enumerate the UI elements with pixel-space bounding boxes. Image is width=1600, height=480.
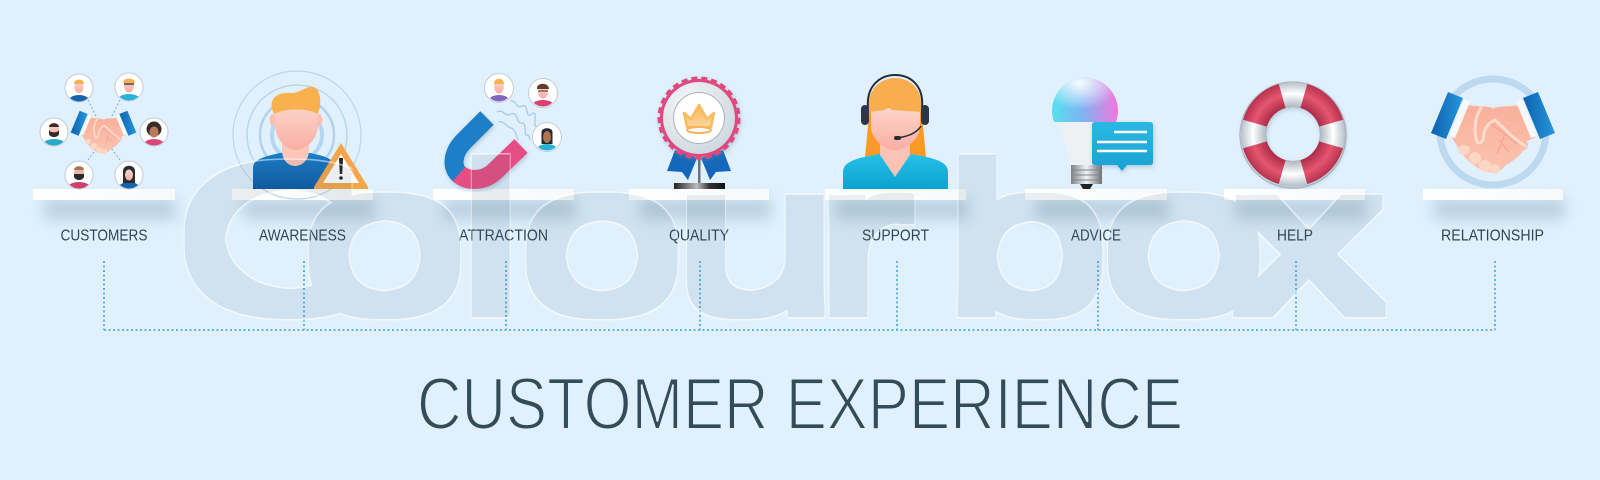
shelf shadow: support xyxy=(836,198,968,220)
watermark: olourbox xyxy=(302,124,1383,354)
shelf shadow: help xyxy=(1235,198,1367,220)
connector: dotted bracket xyxy=(104,261,1495,330)
label: support: SUPPORT xyxy=(862,228,929,244)
shelf: relationship xyxy=(1423,189,1563,200)
avatar: woman with black hair xyxy=(114,160,144,190)
icon: award stem and base xyxy=(674,155,725,189)
panel: advice xyxy=(1025,78,1169,244)
avatar: woman xyxy=(532,122,562,152)
icon: handshake xyxy=(1431,92,1555,174)
shelf shadow: quality xyxy=(640,198,771,220)
shelf: quality xyxy=(629,189,769,200)
shelf shadow: relationship xyxy=(1434,198,1565,220)
attraction waves xyxy=(497,101,539,140)
avatar: man with glasses xyxy=(114,72,144,102)
panel: relationship xyxy=(1423,79,1565,244)
label: relationship: RELATIONSHIP xyxy=(1441,228,1544,244)
avatar: blond person xyxy=(484,73,514,103)
shelf: advice xyxy=(1025,189,1167,200)
watermark: C xyxy=(176,124,389,354)
shelf: awareness xyxy=(232,189,373,200)
shelf shadow: customers xyxy=(44,198,176,220)
label: help: HELP xyxy=(1277,228,1313,244)
connection lines xyxy=(88,100,120,160)
panel: attraction xyxy=(433,74,576,244)
icon: ribbons xyxy=(667,150,731,180)
icon: ring xyxy=(1440,79,1546,185)
icon: handshake xyxy=(71,111,136,154)
label: advice: ADVICE xyxy=(1071,228,1121,244)
title: CUSTOMER EXPERIENCE xyxy=(417,364,1183,445)
shelf: help xyxy=(1224,189,1365,200)
icon: light bulb xyxy=(1052,78,1118,189)
icon: speech bubble xyxy=(1092,122,1153,171)
avatar: blond man xyxy=(64,74,94,102)
panel: support xyxy=(825,75,968,244)
icon: magnet xyxy=(454,118,521,179)
watermark xyxy=(184,153,1386,320)
icon: agent xyxy=(843,78,948,189)
avatar: woman with dark hair xyxy=(140,118,168,146)
label: awareness: AWARENESS xyxy=(259,228,346,244)
icon: crown xyxy=(684,105,714,133)
avatar: man with glasses xyxy=(528,78,558,108)
avatar: masked man xyxy=(64,160,94,190)
avatar: bearded man xyxy=(40,118,68,146)
label: customers: CUSTOMERS xyxy=(60,228,148,244)
panel: help xyxy=(1224,82,1367,244)
shelf: support xyxy=(825,189,966,200)
label: quality: QUALITY xyxy=(669,228,729,244)
panel: customers xyxy=(33,73,176,244)
panel: quality xyxy=(629,78,771,244)
shelf shadow: awareness xyxy=(243,198,375,220)
shelf shadow: advice xyxy=(1036,198,1169,220)
label: attraction: ATTRACTION xyxy=(459,228,548,244)
shelf shadow: attraction xyxy=(444,198,576,220)
icon: lifebuoy xyxy=(1240,82,1346,188)
icon: signal rings xyxy=(233,71,361,199)
icon: rosette xyxy=(660,78,738,158)
icon: warning triangle xyxy=(314,143,368,189)
icon: person xyxy=(253,87,334,189)
shelf: attraction xyxy=(433,189,574,200)
shelf: customers xyxy=(33,189,175,200)
icon: headset xyxy=(861,75,929,140)
panel: awareness xyxy=(232,71,375,244)
